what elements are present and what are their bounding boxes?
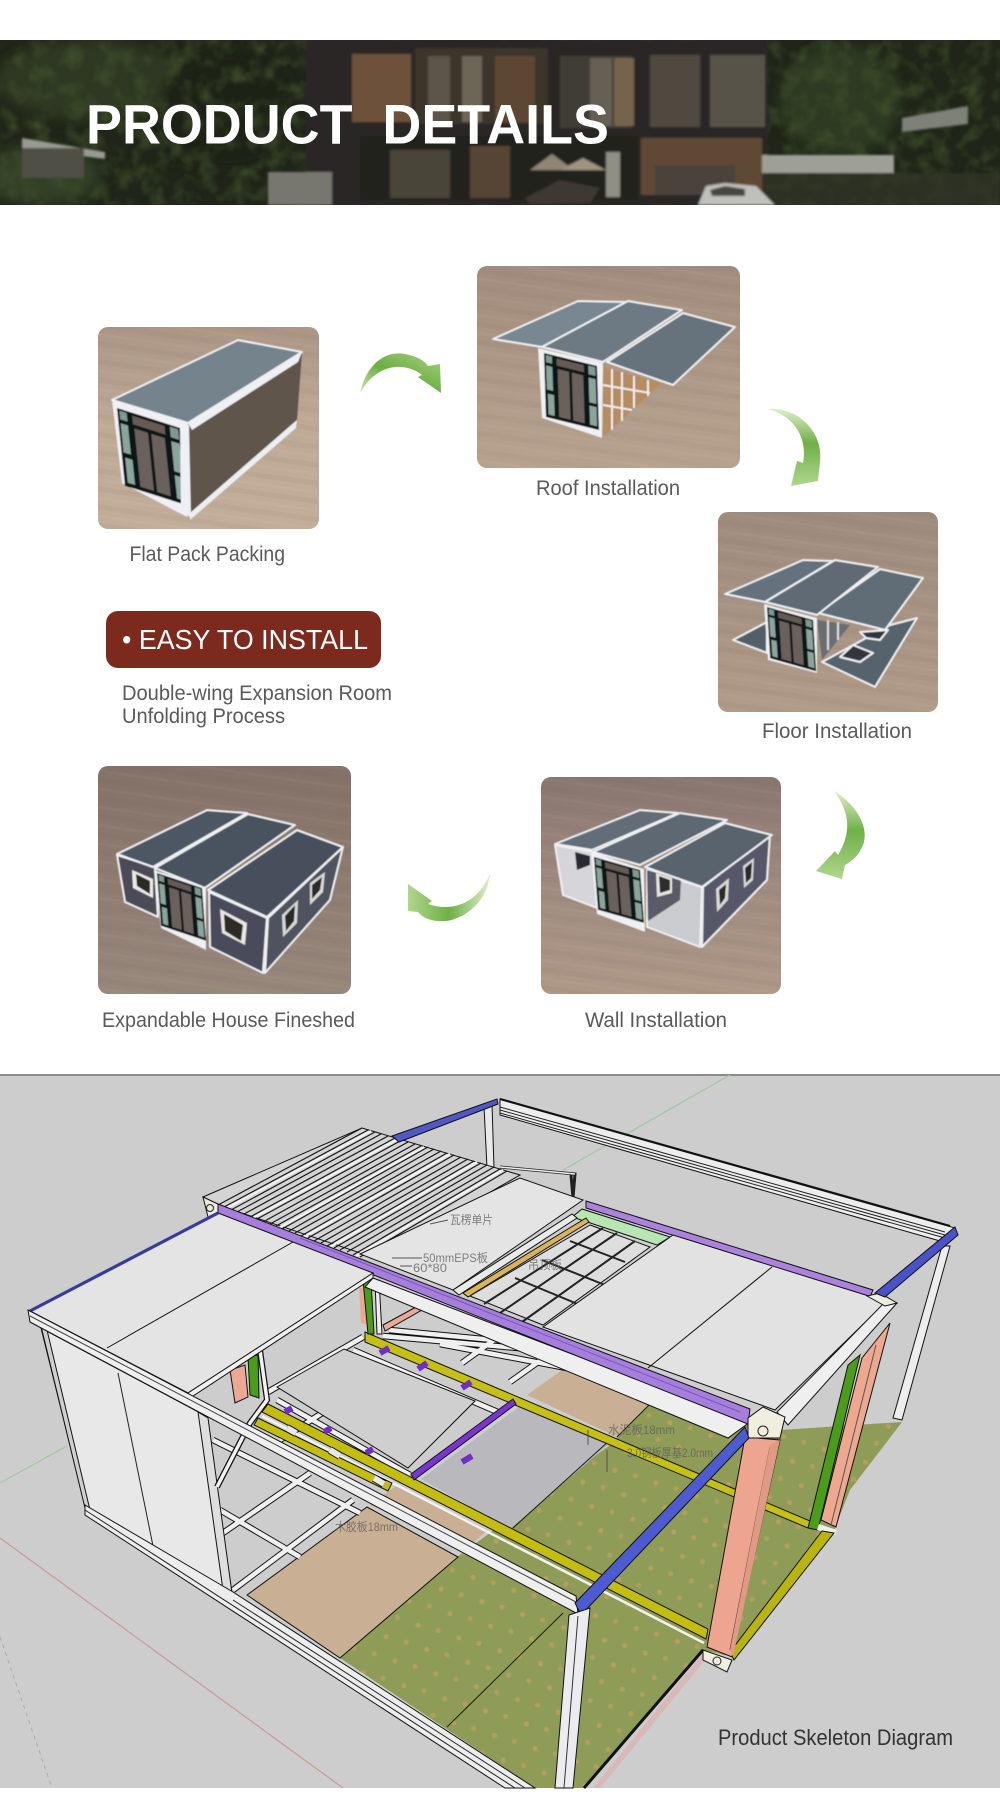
arrow: step three to four — [816, 791, 865, 879]
salmon floor bar — [383, 1301, 429, 1331]
corrugated roof sheet — [203, 1128, 520, 1258]
photo: expandable house finished — [98, 766, 351, 994]
caption: flat pack packing: Flat Pack Packing — [130, 543, 285, 566]
yellow floor beams — [254, 1332, 810, 1643]
caption: product skeleton diagram: Product Skeleton Diagram — [718, 1725, 953, 1750]
dimension labels — [335, 1212, 713, 1534]
dimension labels: 3.0钢板厚基2.0mm — [627, 1446, 713, 1460]
left roof slab — [28, 1213, 578, 1614]
dimension labels: 水泥板18mm — [608, 1423, 675, 1437]
dimension labels: 吊顶板 — [528, 1258, 562, 1272]
floor frame grid — [213, 1330, 567, 1590]
dimension labels: 瓦楞单片 — [450, 1212, 493, 1227]
front blue beam — [575, 1427, 749, 1615]
text: unfolding description: Unfolding Process — [122, 705, 285, 728]
purple roof beams — [203, 1197, 873, 1438]
dimension labels: 50mmEPS板 — [423, 1251, 488, 1265]
dimension labels: 木胶板18mm — [335, 1519, 398, 1534]
end floor beam — [730, 1531, 834, 1660]
caption: expandable house finished: Expandable House Fineshed — [102, 1009, 355, 1032]
banner photo — [0, 40, 1000, 205]
front corner column — [555, 1608, 590, 1788]
text: unfolding description: Double-wing Expansion Room — [122, 682, 392, 705]
photo: roof installation — [477, 266, 740, 468]
text: unfolding description — [122, 682, 392, 728]
back frame beams — [484, 1099, 955, 1420]
dimension labels: 60*80 — [413, 1261, 447, 1275]
photo: flat pack packing — [98, 327, 319, 529]
front corner post — [703, 1407, 785, 1672]
arrow: step two to three — [767, 409, 820, 486]
caption: wall installation: Wall Installation — [585, 1009, 727, 1032]
badge: easy to install — [106, 611, 381, 668]
caption: floor installation: Floor Installation — [762, 720, 912, 743]
caption: roof installation: Roof Installation — [536, 477, 680, 500]
floor panels — [247, 1363, 902, 1788]
left wall — [41, 1326, 535, 1788]
blue back beam — [392, 1099, 498, 1142]
right roof slab — [543, 1227, 958, 1425]
ceiling panels and grid — [360, 1178, 670, 1325]
arrow: step one to two — [360, 353, 441, 393]
skeleton diagram panel — [0, 1074, 1000, 1788]
arrow: step four to five — [408, 873, 490, 921]
photo: wall installation — [541, 777, 781, 994]
back corner posts — [808, 1323, 890, 1535]
title: PRODUCT DETAILS — [86, 92, 609, 156]
inner posts and brace — [217, 1280, 382, 1487]
badge: easy to install: • EASY TO INSTALL — [122, 624, 368, 655]
photo: floor installation — [718, 512, 938, 712]
